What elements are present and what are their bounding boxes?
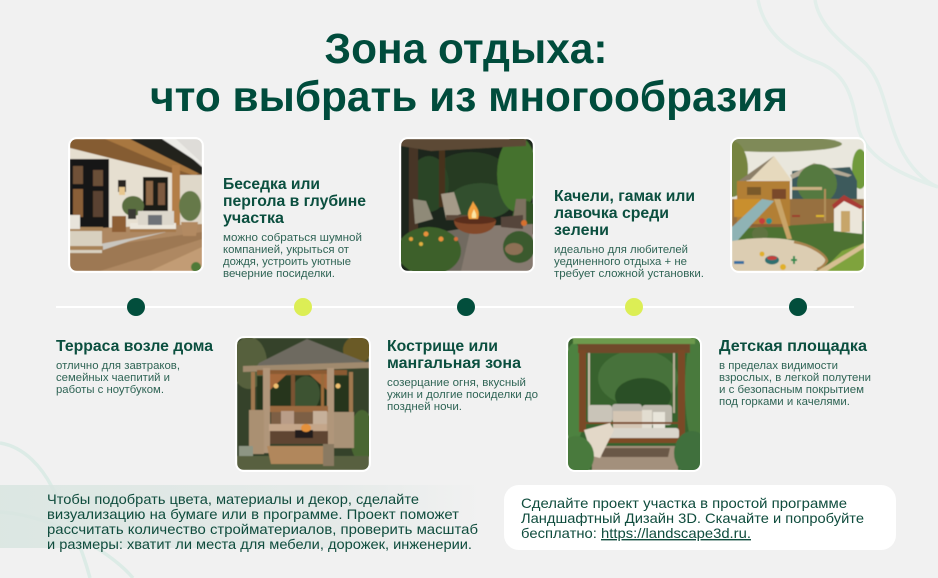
card: swing, hammock or bench: идеально для любителей	[554, 244, 688, 256]
card: swing, hammock or bench: Качели, гамак или	[554, 188, 695, 205]
card: fire pit or grill zone: поздней ночи.	[387, 401, 462, 413]
card: swing, hammock or bench: зелени	[554, 222, 609, 239]
card: fire pit or grill zone: созерцание огня, вкусный	[387, 377, 526, 389]
photo: swing in greenery	[566, 336, 702, 472]
timeline	[56, 298, 854, 316]
card: playground: Детская площадка	[719, 338, 867, 355]
card: fire pit or grill zone	[387, 338, 538, 413]
card: terrace	[56, 338, 213, 396]
card: gazebo or pergola: Беседка или	[223, 176, 320, 193]
title: Зона отдыха:	[324, 25, 608, 73]
photo: gazebo	[231, 336, 374, 472]
decorative curves: bottom left	[0, 443, 133, 578]
card: fire pit or grill zone: мангальная зона	[387, 355, 521, 372]
card: gazebo or pergola: участка	[223, 210, 284, 227]
card: fire pit or grill zone: ужин и долгие посиделки до	[387, 389, 538, 401]
note band: planning advice	[0, 485, 480, 552]
card: fire pit or grill zone: Кострище или	[387, 338, 498, 355]
callout: software link: бесплатно: https://landscape3d.ru.	[521, 525, 751, 541]
callout: software link	[504, 485, 896, 550]
card: gazebo or pergola: вечерние посиделки.	[223, 268, 335, 280]
card: terrace: работы с ноутбуком.	[56, 384, 164, 396]
card: playground: в пределах видимости	[719, 360, 838, 372]
card: terrace: отлично для завтраков,	[56, 360, 180, 372]
photo: fire pit	[397, 136, 540, 275]
card: gazebo or pergola: дождя, устроить уютные	[223, 256, 351, 268]
card: swing, hammock or bench	[554, 188, 704, 280]
card: playground: и с безопасным покрытием	[719, 384, 864, 396]
photo: terrace by the house	[68, 137, 204, 273]
card: swing, hammock or bench: лавочка среди	[554, 205, 669, 222]
card: swing, hammock or bench: уединенного отдыха + не	[554, 256, 687, 268]
card: terrace: семейных чаепитий и	[56, 372, 170, 384]
photo: children's playground	[730, 137, 866, 273]
card: swing, hammock or bench: требует сложной установки.	[554, 268, 704, 280]
title	[150, 25, 788, 121]
card: playground: под горками и качелями.	[719, 396, 850, 408]
callout: software link: Сделайте проект участка в простой программе	[521, 495, 847, 511]
note band: planning advice: рассчитать количество стройматериалов, проверить масштаб	[47, 521, 478, 537]
note band: planning advice: визуализацию на бумаге или в программе. Проект поможет	[47, 506, 460, 522]
decorative curves: top right	[758, 0, 938, 187]
card: gazebo or pergola	[223, 176, 366, 280]
card: terrace: Терраса возле дома	[56, 338, 213, 355]
card: playground: взрослых, в легкой полутени	[719, 372, 871, 384]
card: playground	[719, 338, 871, 408]
card: gazebo or pergola: можно собраться шумной	[223, 232, 362, 244]
title: что выбрать из многообразия	[150, 73, 788, 121]
note band: planning advice: и размеры: хватит ли места для мебели, дорожек, инженерии.	[47, 536, 472, 552]
card: gazebo or pergola: компанией, укрыться от	[223, 244, 349, 256]
card: gazebo or pergola: пергола в глубине	[223, 193, 366, 210]
callout: software link: Ландшафтный Дизайн 3D. Скачайте и попробуйте	[521, 510, 864, 526]
note band: planning advice: Чтобы подобрать цвета, материалы и декор, сделайте	[47, 491, 419, 507]
